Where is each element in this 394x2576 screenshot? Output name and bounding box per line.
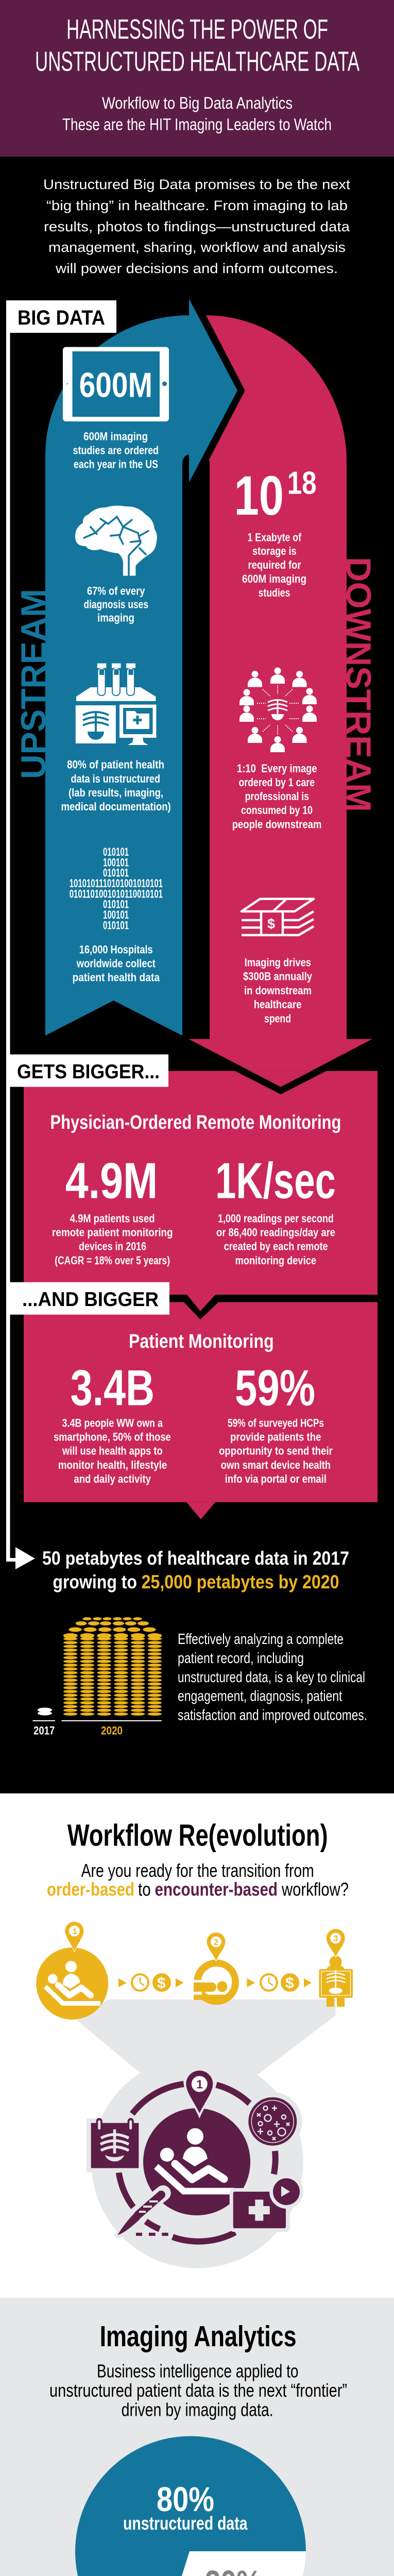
text: 1,000 readings: created by each remote: [224, 1240, 328, 1253]
subtitle: [62, 94, 332, 134]
text: 3.4B people: and daily activity: [74, 1472, 151, 1485]
text: 1:10 every image: professional is: [245, 790, 309, 803]
pie label: 80%: unstructured data: [123, 2513, 248, 2534]
text: transition question: [47, 1860, 349, 1900]
icon: binary cross: 010101: [103, 867, 129, 879]
arrow: gold 4: [304, 1978, 312, 1987]
text: 4.9M patients: (CAGR = 18% over 5 years): [55, 1254, 170, 1267]
intro text: will power decisions and inform outcomes.: [55, 261, 338, 276]
text: 600M imaging studies: 600M imaging: [83, 430, 148, 443]
text: 1,000 readings: [216, 1212, 335, 1267]
text: 1,000 readings: monitoring device: [235, 1254, 316, 1267]
text: effectively analyzing: Effectively analyzing a complete: [178, 1631, 344, 1648]
icon: MRI scanner: [191, 1960, 239, 2007]
text: 67% of every diagnosis: diagnosis uses: [83, 598, 148, 611]
icon: clock 1: [131, 1973, 149, 1992]
heading: imaging analytics: Imaging Analytics: [100, 2320, 297, 2353]
arrow: gold 2: [176, 1978, 184, 1987]
text: 16,000 hospitals: worldwide collect: [76, 957, 156, 970]
icon: binary cross: 1010101110101001010101: [70, 877, 163, 890]
text: transition question: to: [138, 1878, 151, 1900]
intro text: results, photos to findings—unstructured data: [44, 219, 350, 234]
chart part: 2017 stack: 2017: [33, 1724, 55, 1737]
icon: pin 1: [65, 1922, 84, 1952]
text: 1 exabyte of storage: 600M imaging: [242, 572, 306, 585]
text: imaging drives $300B: $300B annually: [243, 970, 313, 983]
arrow: gold 3: [247, 1978, 255, 1987]
text: 1 exabyte of storage: storage is: [252, 545, 297, 557]
icon: pin 1: 1: [73, 1927, 77, 1936]
subtitle: These are the HIT Imaging Leaders to Watch: [62, 115, 332, 134]
icon: stack of money: $: [267, 916, 275, 931]
icon: binary cross: 0101101001010110010101: [70, 887, 163, 901]
text: transition question: order-based: [47, 1878, 134, 1900]
panel: imaging analytics: [0, 2298, 394, 2576]
heading: and bigger: [10, 1282, 169, 1315]
text: 1:10 every image: [232, 762, 321, 831]
text: 4.9M patients: 4.9M patients used: [70, 1212, 155, 1225]
text: 80% of patient health data: 80% of patient health: [67, 758, 164, 771]
text: 3.4B people: 3.4B people WW own a: [62, 1416, 163, 1429]
text: 600M imaging studies: [73, 430, 159, 470]
text: 1:10 every image: consumed by 10: [241, 804, 313, 817]
text: 1,000 readings: or 86,400 readings/day are: [216, 1226, 335, 1239]
icon: binary cross: 100101: [103, 856, 129, 869]
chart part: 2017 stack: [32, 1707, 55, 1737]
label: downstream: DOWNSTREAM: [339, 557, 378, 812]
text: 3.4B people: monitor health, lifestyle: [58, 1459, 167, 1471]
text: 1 exabyte of storage: required for: [248, 558, 301, 571]
icon: one image many people: [239, 668, 317, 752]
icon: tablet with 600M: [63, 347, 169, 421]
intro text: [43, 177, 351, 276]
icon: encounter pin: 1: [196, 2077, 203, 2091]
heading: big data: [6, 300, 116, 333]
text: 80% of patient health data: [61, 758, 171, 813]
text: 80% of patient health data: data is unstructured: [71, 772, 160, 785]
intro text: management, sharing, workflow and analysis: [48, 240, 346, 255]
icon: pin 3: [326, 1929, 345, 1957]
text: 67% of every diagnosis: [83, 584, 148, 624]
text: 59% of surveyed HCPs: opportunity to send their: [219, 1445, 333, 1458]
subtitle: Workflow to Big Data Analytics: [102, 94, 293, 112]
text: 1:10 every image: ordered by 1 care: [238, 776, 315, 789]
heading: patient monitoring: Patient Monitoring: [129, 1331, 274, 1352]
label: upstream: UPSTREAM: [14, 589, 53, 779]
icon: encounter pin: [185, 2070, 214, 2116]
text: effectively analyzing: engagement, diagnosis, patient: [178, 1688, 342, 1705]
text: 59% of surveyed HCPs: own smart device health: [221, 1459, 331, 1471]
arrow: downstream pink: [189, 315, 372, 1087]
heading: and bigger: ...AND BIGGER: [22, 1289, 159, 1311]
icon: brain: [75, 505, 157, 576]
chart part: 2020 stack: 2020: [101, 1724, 123, 1737]
icon: binary cross: [70, 845, 163, 931]
icon: step 1 patient gold: [36, 1947, 108, 2020]
arrow: gold 1: [118, 1978, 127, 1987]
stat: 3.4B: 3.4B: [71, 1360, 155, 1416]
icon: binary cross: 010101: [103, 919, 129, 931]
text: 16,000 hospitals: 16,000 Hospitals: [79, 943, 153, 956]
text: 80% of patient health data: medical documentation): [61, 800, 171, 813]
icon: scalpel: [117, 2193, 163, 2235]
icon: binary cross: 010101: [103, 897, 129, 911]
icon: tablet with 600M: 600M: [79, 365, 152, 404]
chart: pie of unstructured vs structured: [75, 2436, 306, 2576]
text: 59% of surveyed HCPs: provide patients the: [230, 1430, 321, 1444]
icon: dollar 2: $: [285, 1975, 294, 1992]
text: 1 exabyte of storage: studies: [259, 586, 290, 599]
text: effectively analyzing: [178, 1631, 367, 1723]
text: 59% of surveyed HCPs: [219, 1416, 333, 1485]
text: 600M imaging studies: each year in the US: [74, 457, 158, 470]
text: imaging drives $300B: spend: [264, 1012, 291, 1025]
heading: 50 petabytes: 50 petabytes of healthcare data in 2017: [42, 1548, 349, 1569]
text: 4.9M patients: remote patient monitoring: [52, 1226, 173, 1239]
icon: binary cross: 100101: [103, 908, 129, 921]
intro text: “big thing” in healthcare. From imaging to lab: [46, 198, 348, 213]
text: 59% of surveyed HCPs: info via portal or email: [225, 1472, 327, 1485]
panel: patient monitoring: [24, 1295, 378, 1519]
diagram: grey funnel: [77, 1999, 336, 2268]
stat: 1K/sec: 1K/sec: [215, 1152, 336, 1209]
heading: gets bigger: GETS BIGGER...: [17, 1061, 160, 1083]
icon: dollar 1: [152, 1973, 171, 1992]
text: business intelligence: driven by imaging data.: [122, 2399, 273, 2420]
chart: data coin stacks: [32, 1617, 162, 1737]
text: transition question: workflow?: [281, 1878, 349, 1900]
text: 600M imaging studies: studies are ordered: [73, 444, 159, 456]
text: 3.4B people: smartphone, 50% of those: [54, 1430, 171, 1444]
text: 1 exabyte of storage: 1 Exabyte of: [247, 531, 302, 544]
diagram: encounter ring arcs: [119, 2084, 276, 2242]
text: business intelligence: Business intelligence applied to: [97, 2360, 299, 2381]
pie label: 80%: [123, 2480, 248, 2534]
text: 1:10 every image: 1:10 Every image: [237, 762, 317, 775]
chart part: 2020 stack: [62, 1617, 162, 1737]
text: 80% of patient health data: (lab results, imaging,: [68, 786, 163, 799]
icon: dollar 1: $: [157, 1975, 166, 1992]
intro text: Unstructured Big Data promises to be the next: [43, 177, 351, 192]
pie label: 80%: 80%: [157, 2480, 214, 2519]
text: 59% of surveyed HCPs: 59% of surveyed HCPs: [228, 1416, 324, 1429]
icon: medical kit and play: [230, 2175, 303, 2232]
text: effectively analyzing: patient record, including: [178, 1650, 304, 1667]
text: 67% of every diagnosis: imaging: [97, 612, 134, 624]
stat: 10 to the 18: 18: [287, 466, 317, 501]
text: 16,000 hospitals: [72, 943, 160, 984]
icon: pin 3: 3: [333, 1935, 338, 1943]
heading: 50 petabytes: growing to: [53, 1571, 137, 1592]
text: 1,000 readings: 1,000 readings per second: [218, 1212, 334, 1225]
text: imaging drives $300B: in downstream: [244, 984, 312, 997]
text: imaging drives $300B: healthcare: [254, 998, 301, 1011]
text: 67% of every diagnosis: 67% of every: [87, 584, 145, 597]
text: 16,000 hospitals: patient health data: [72, 971, 160, 984]
panel: black big data section: [0, 157, 394, 1793]
panel: header banner: [0, 0, 394, 157]
text: imaging drives $300B: [243, 956, 313, 1025]
icon: lab tubes, x-ray and monitor: [76, 664, 156, 745]
icon: pin 2: 2: [214, 1938, 218, 1947]
text: 4.9M patients: devices in 2016: [79, 1240, 146, 1253]
stat: 59%: 59%: [235, 1360, 315, 1416]
text: imaging drives $300B: Imaging drives: [245, 956, 311, 969]
text: 3.4B people: [54, 1416, 171, 1485]
heading: 50 petabytes: [42, 1548, 349, 1592]
heading: big data: BIG DATA: [18, 307, 105, 329]
icon: clock 2: [260, 1973, 278, 1992]
text: 1:10 every image: people downstream: [232, 818, 321, 831]
arrow: upstream blue: [45, 299, 237, 1036]
icon: central patient purple: [143, 2108, 250, 2215]
panel: workflow revolution: [36, 1819, 353, 2268]
icon: pin 2: [207, 1932, 226, 1961]
icon: stack of money: [242, 899, 314, 935]
text: 1 exabyte of storage: [242, 531, 306, 599]
title: [35, 14, 359, 77]
text: 4.9M patients: [52, 1212, 173, 1267]
panel: physician-ordered remote monitoring: [24, 1071, 378, 1295]
icon: magnifier: [243, 2092, 302, 2151]
text: transition question: encounter-based: [155, 1878, 278, 1900]
heading: 50 petabytes: 25,000 petabytes by 2020: [142, 1571, 339, 1592]
text: business intelligence: [49, 2360, 347, 2420]
arrow: white connector line: [6, 309, 35, 1569]
stat: 10 to the 18: 10: [234, 464, 284, 527]
text: 3.4B people: will use health apps to: [62, 1445, 163, 1458]
icon: dollar 2: [281, 1973, 299, 1992]
icon: binary cross: 010101: [103, 845, 129, 858]
icon: x-ray clipboard: [87, 2119, 143, 2173]
stat: 4.9M: 4.9M: [65, 1152, 158, 1209]
heading: gets bigger: [10, 1055, 168, 1087]
text: transition question: Are you ready for the transition from: [81, 1860, 314, 1881]
icon: x-ray body: [319, 1956, 353, 2007]
